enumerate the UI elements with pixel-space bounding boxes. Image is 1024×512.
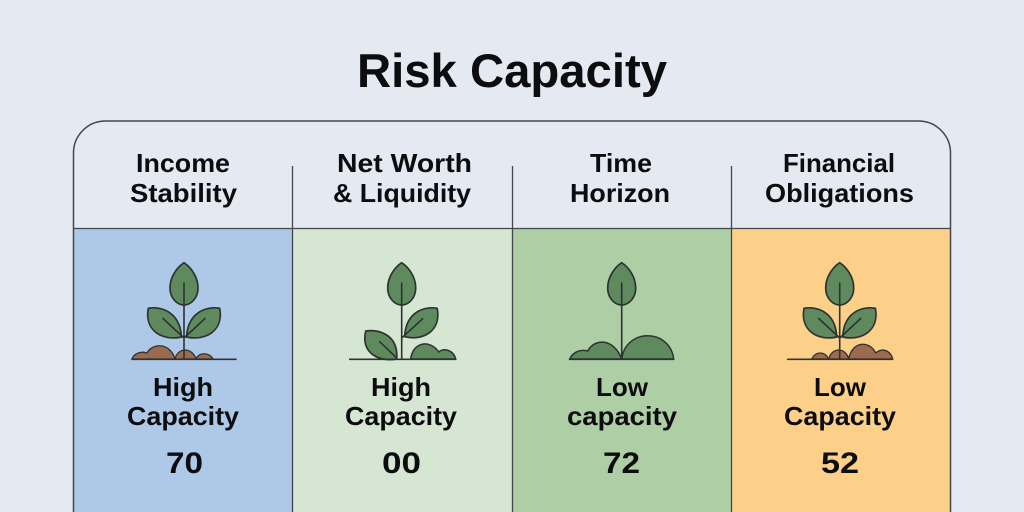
heading: time horizon: Time xyxy=(590,148,652,178)
panel: time horizon colour column xyxy=(512,228,732,512)
icon: plant with three leaves and soil, financial obligations xyxy=(788,263,893,359)
heading: time horizon xyxy=(570,148,670,208)
icon: plant with low left leaf and green bush, net worth xyxy=(350,263,456,360)
label: net worth capacity xyxy=(345,372,458,431)
number: net worth score: 00 xyxy=(382,447,421,480)
heading: net worth and liquidity: & Liquidity xyxy=(333,178,472,208)
label: financial obligations capacity: Low xyxy=(814,372,867,402)
number: income stability score: 70 xyxy=(166,447,203,480)
label: income stability capacity xyxy=(127,372,240,431)
heading: net worth and liquidity: Net Worth xyxy=(337,148,472,178)
table outline xyxy=(74,121,950,512)
heading: financial obligations: Financial xyxy=(783,148,895,178)
icon: plant with three leaves and soil, income stability xyxy=(132,263,236,359)
heading: income stability: Income xyxy=(136,148,230,178)
label: financial obligations capacity xyxy=(784,372,897,431)
label: financial obligations capacity: Capacity xyxy=(784,401,897,431)
number: time horizon score: 72 xyxy=(603,447,640,480)
heading: income stability: Stability xyxy=(130,178,238,208)
label: income stability capacity: High xyxy=(153,372,213,402)
label: time horizon capacity: Low xyxy=(596,372,649,402)
heading: financial obligations xyxy=(765,148,914,208)
label: income stability capacity: Capacity xyxy=(127,401,240,431)
panel: financial obligations colour column xyxy=(732,228,950,512)
heading: time horizon: Horizon xyxy=(570,178,670,208)
title: Risk Capacity xyxy=(357,44,667,97)
heading: net worth and liquidity xyxy=(333,148,472,208)
label: net worth capacity: High xyxy=(371,372,431,402)
icon: single leaf sprout with green mounds, time horizon xyxy=(570,263,674,359)
heading: income stability xyxy=(130,148,238,208)
label: net worth capacity: Capacity xyxy=(345,401,458,431)
label: time horizon capacity: capacity xyxy=(567,401,678,431)
heading: financial obligations: Obligations xyxy=(765,178,914,208)
panel: income stability colour column xyxy=(74,228,292,512)
panel: net worth colour column xyxy=(292,228,512,512)
label: time horizon capacity xyxy=(567,372,678,431)
number: financial obligations score: 52 xyxy=(821,447,859,480)
panel: risk capacity table xyxy=(74,121,950,512)
